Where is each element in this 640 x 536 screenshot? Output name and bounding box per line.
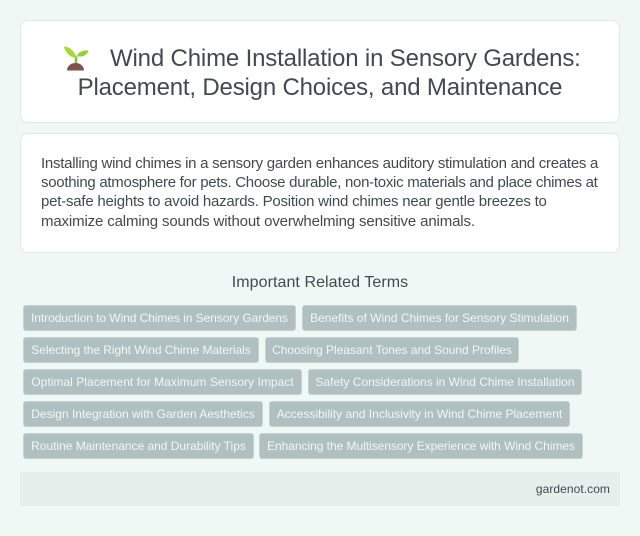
summary text xyxy=(41,155,598,230)
tag: Accessibility and Inclusivity in Wind Chime Placement xyxy=(277,407,562,421)
title xyxy=(78,45,581,101)
tag: Benefits of Wind Chimes for Sensory Stimulation xyxy=(310,311,569,325)
footer xyxy=(20,472,620,506)
heading: related terms: Important Related Terms xyxy=(232,274,408,291)
tag xyxy=(269,401,570,427)
tag xyxy=(23,305,296,331)
panel: summary xyxy=(20,133,620,253)
tag xyxy=(259,433,583,459)
tag xyxy=(308,369,582,395)
tag xyxy=(23,401,263,427)
tag: Safety Considerations in Wind Chime Installation xyxy=(316,375,574,389)
tag: Selecting the Right Wind Chime Materials xyxy=(31,343,251,357)
tag: Enhancing the Multisensory Experience with Wind Chimes xyxy=(267,439,575,453)
tag xyxy=(23,433,254,459)
title: Placement, Design Choices, and Maintenance xyxy=(78,74,562,101)
title: Wind Chime Installation in Sensory Gardens: xyxy=(110,45,581,72)
tag xyxy=(265,337,519,363)
summary text: pet-safe heights to avoid hazards. Position wind chimes near gentle breezes to xyxy=(41,193,547,210)
tag xyxy=(23,369,302,395)
tag xyxy=(302,305,577,331)
title card xyxy=(20,20,620,123)
tag: Routine Maintenance and Durability Tips xyxy=(31,439,246,453)
footer source text: gardenot.com xyxy=(536,482,610,496)
tag: Introduction to Wind Chimes in Sensory Gardens xyxy=(31,311,288,325)
icon: seedling xyxy=(64,46,88,70)
tag: Choosing Pleasant Tones and Sound Profiles xyxy=(272,343,512,357)
summary text: Installing wind chimes in a sensory garden enhances auditory stimulation and creates a xyxy=(41,155,598,172)
tag xyxy=(23,337,259,363)
summary text: soothing atmosphere for pets. Choose durable, non-toxic materials and place chimes at xyxy=(41,174,598,191)
summary text: maximize calming sounds without overwhelming sensitive animals. xyxy=(41,213,475,230)
tag: Design Integration with Garden Aesthetics xyxy=(31,407,255,421)
related term tags xyxy=(23,305,583,459)
tag: Optimal Placement for Maximum Sensory Impact xyxy=(31,375,294,389)
